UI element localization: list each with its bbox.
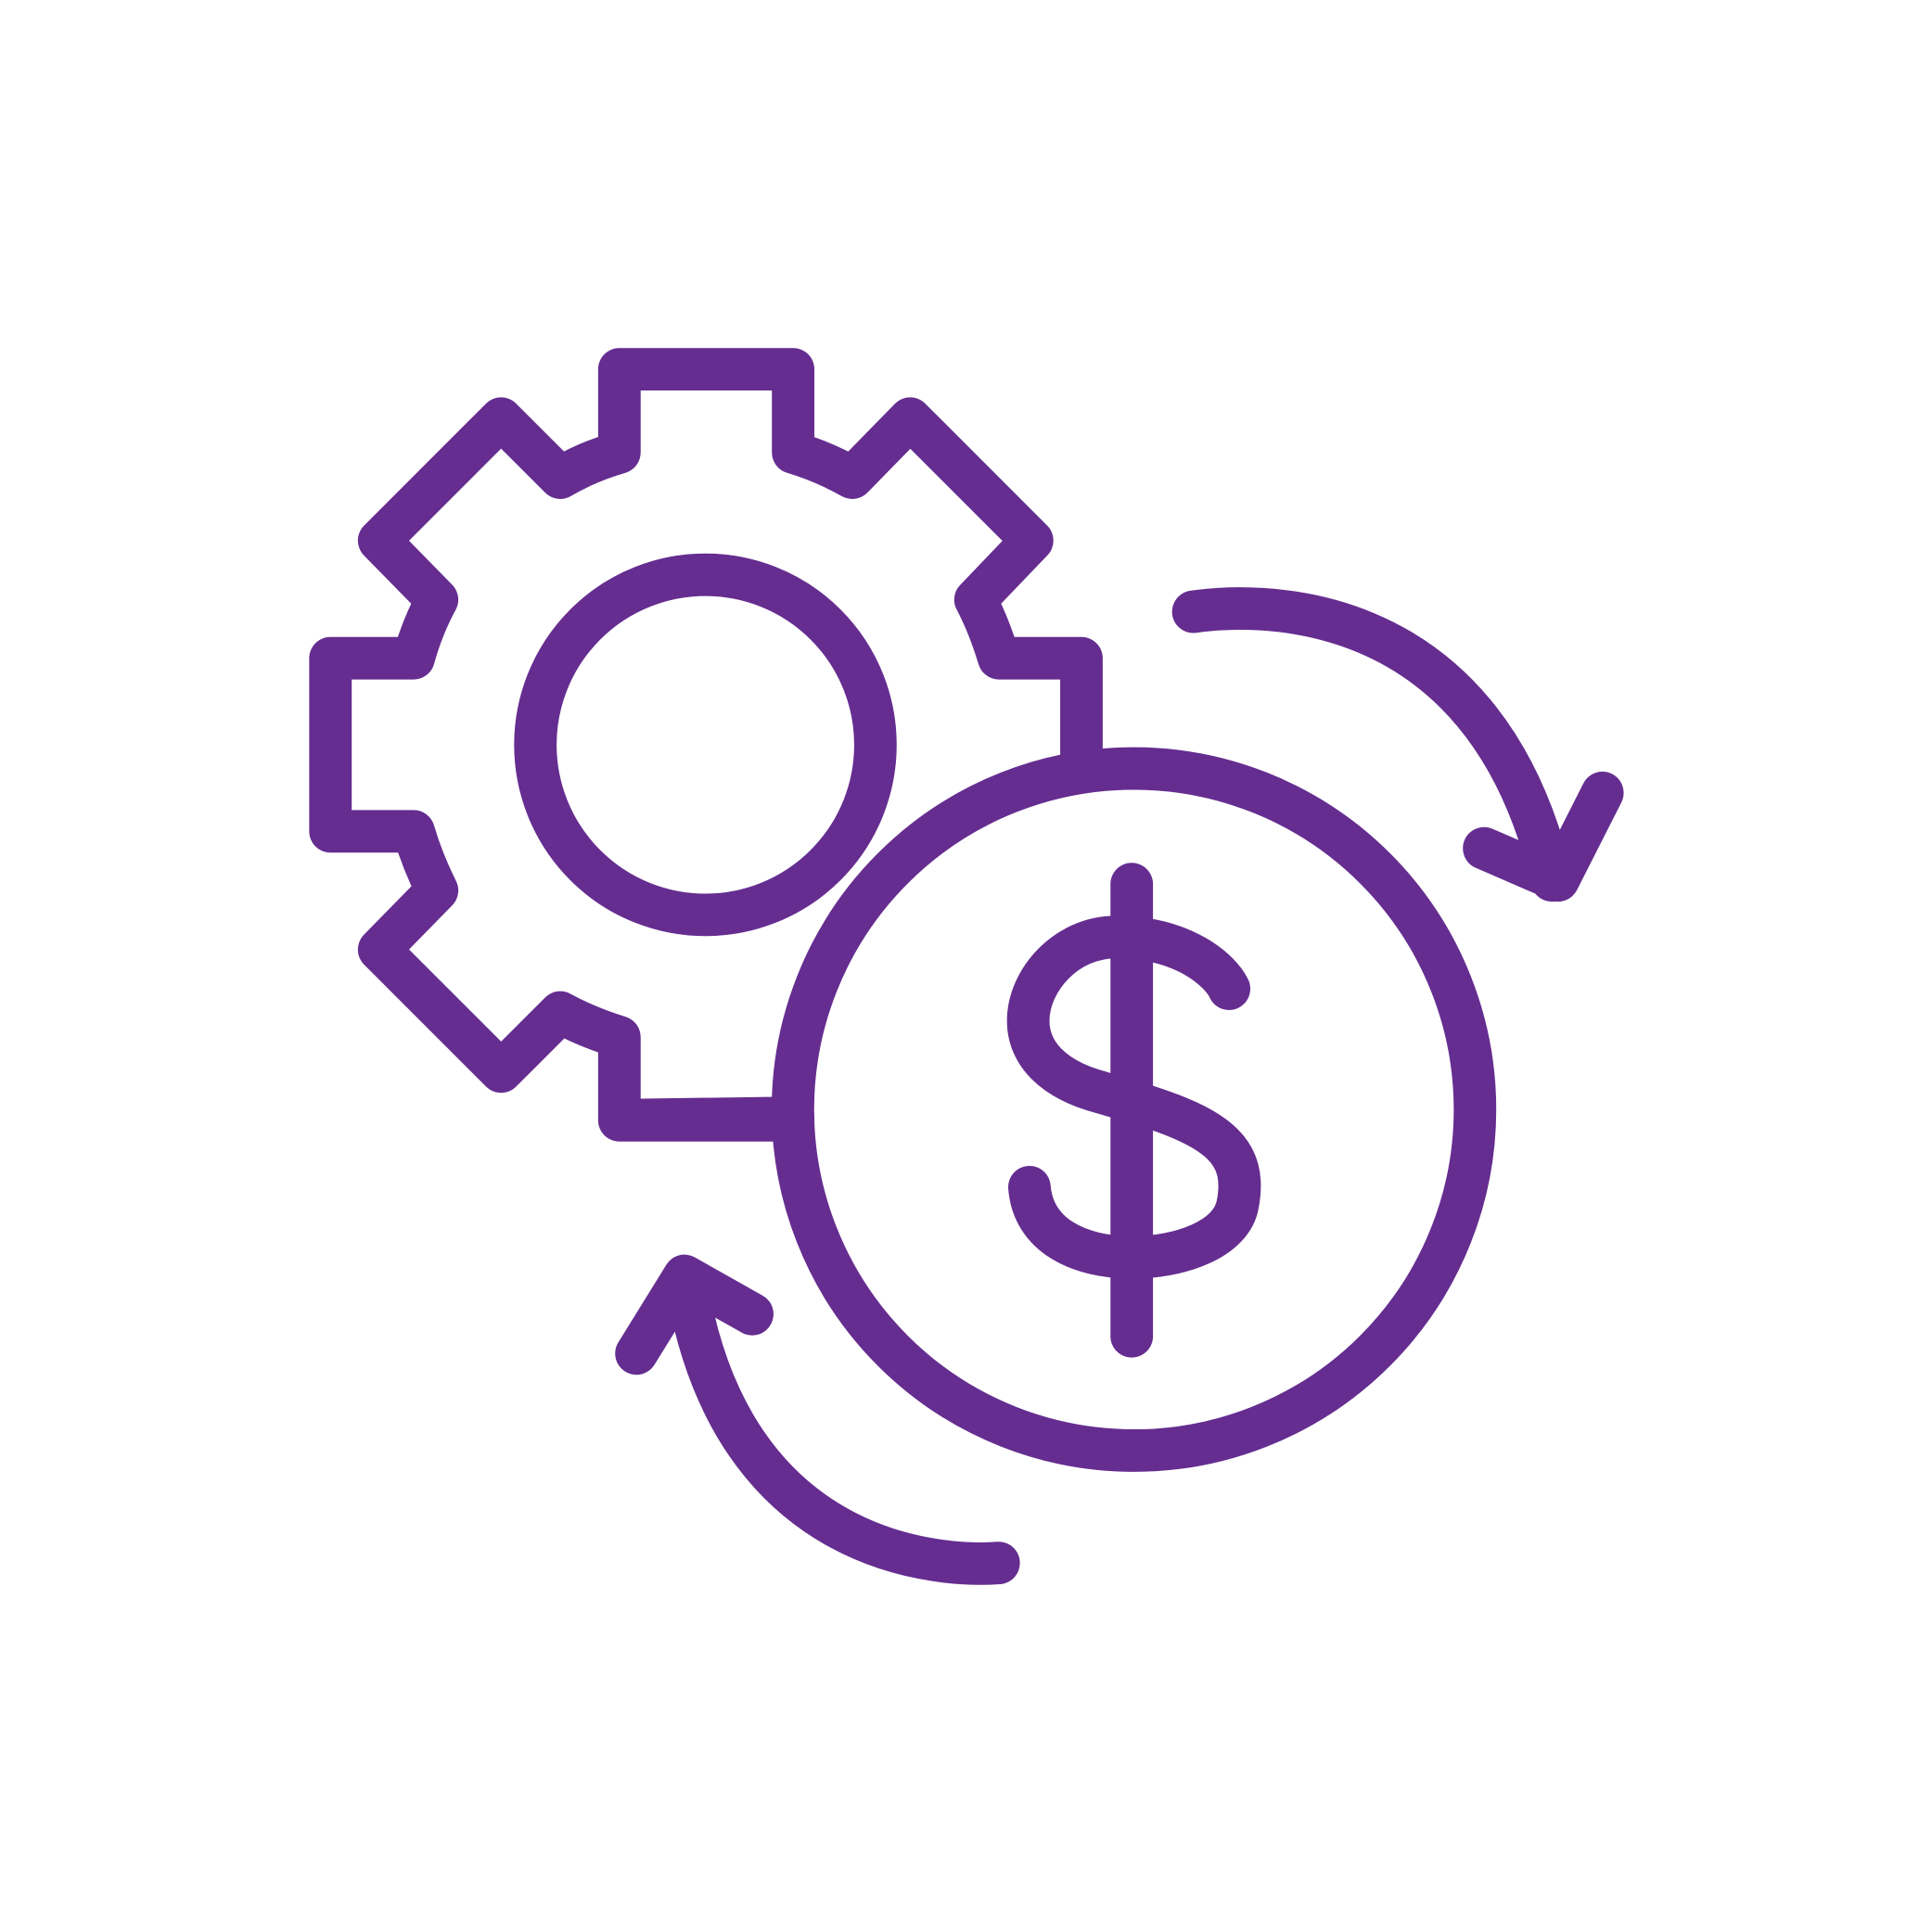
arrow: upper right cycle arrow	[1194, 608, 1603, 880]
arrow shaft	[685, 1278, 999, 1564]
arrow shaft	[1194, 608, 1552, 880]
icon: gear outline	[330, 369, 1081, 1120]
icon: coin ring	[793, 769, 1475, 1451]
icon: gear centre ring	[535, 575, 876, 915]
icon: dollar sign	[1029, 884, 1239, 1337]
arrow head	[636, 1276, 752, 1353]
dollar sign S curve	[1029, 937, 1239, 1258]
arrow head	[1484, 793, 1603, 880]
arrow: lower left cycle arrow	[636, 1276, 999, 1564]
dollar sign vertical bar	[1116, 884, 1147, 1337]
